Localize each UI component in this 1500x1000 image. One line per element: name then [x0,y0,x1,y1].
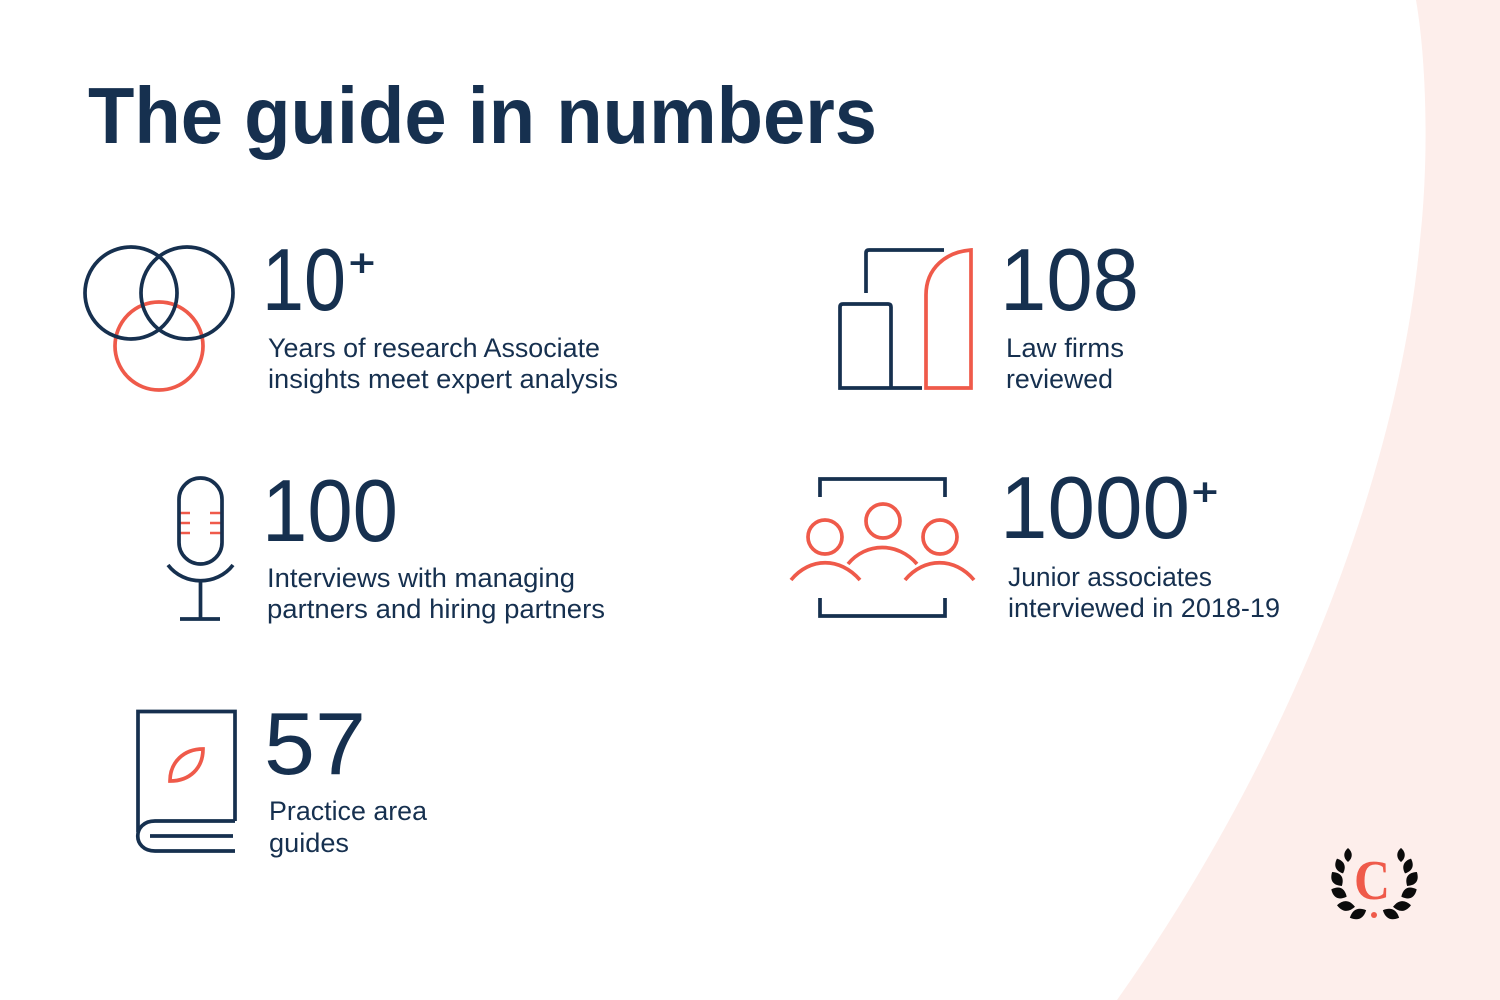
description: law firms reviewed [1006,333,1124,394]
description: junior associates [1008,562,1280,623]
stat: 57 practice area guides [138,694,427,858]
stat: 1000+ junior associates [791,458,1280,623]
dot [1371,912,1377,918]
number: 10+: 10 [262,230,346,329]
number: 10+: + [349,243,375,285]
icon: group of people [791,479,974,616]
icon: overlapping circles [85,247,233,390]
icon: buildings [840,250,971,388]
description: law firms reviewed: reviewed [1006,364,1113,394]
number: 1000+: 1000 [1000,458,1190,557]
description: practice area guides: guides [269,828,349,858]
description: years of research [268,333,618,394]
description: interviews: partners and hiring partners [267,594,605,624]
description: law firms reviewed: Law firms [1006,333,1124,363]
stat: 100 interviews [168,461,605,624]
description: interviews: Interviews with managing [267,563,575,593]
icon: microphone [168,478,233,619]
number: 57: 57 [264,694,366,793]
laurel leaves [1328,848,1421,922]
number: 100: 100 [262,461,398,560]
icon: book with leaf [138,712,235,851]
description: years of research: Years of research Associate [268,333,600,363]
number: 108: 108 [1000,230,1139,329]
logo: laurel wreath with C [1328,848,1421,922]
stat: 10+ years of research [85,230,618,394]
description: years of research: insights meet expert analysis [268,364,618,394]
pink background curve [1117,0,1500,1000]
description: interviews [267,563,605,624]
description: junior associates: interviewed in 2018-19 [1008,593,1280,623]
description: practice area guides [269,796,427,858]
number: 1000+: + [1192,472,1218,514]
description: practice area guides: Practice area [269,796,427,826]
letter C: C [1354,850,1390,912]
stat: 108 law firms [840,230,1139,394]
description: junior associates: Junior associates [1008,562,1212,592]
title: The guide in numbers [88,71,877,160]
